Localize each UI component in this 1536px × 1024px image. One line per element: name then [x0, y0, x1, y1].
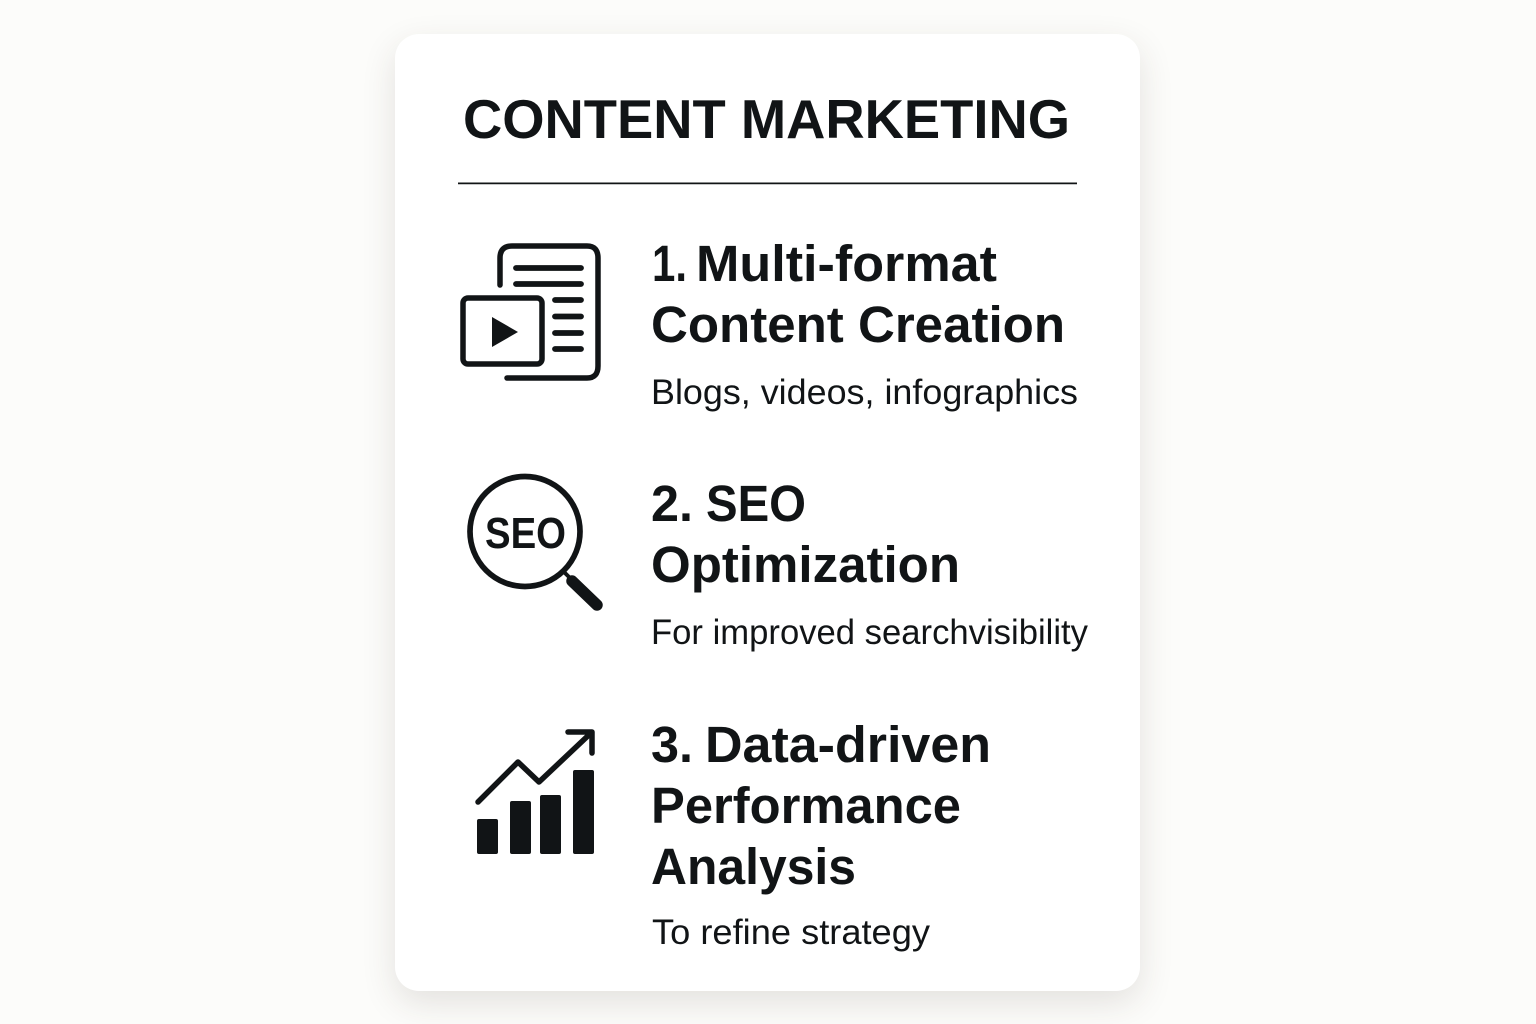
panel: card: [395, 34, 1140, 991]
heading: item 1: 1.: [652, 235, 687, 292]
heading: item 1: [651, 235, 1065, 353]
text: item 2 description: For improved searchvisibility: [651, 612, 1088, 652]
heading: item 1: Content Creation: [651, 296, 1065, 353]
icon: SEO magnifier: [470, 476, 597, 605]
heading: item 3: Analysis: [651, 838, 856, 895]
text: item 1 description: Blogs, videos, infographics: [651, 372, 1078, 412]
title: CONTENT MARKETING: [463, 88, 1070, 150]
icon: SEO magnifier: SEO: [485, 509, 566, 558]
icon: growth chart: [477, 732, 594, 854]
text: item 3 description: To refine strategy: [652, 912, 930, 952]
heading: item 2: [651, 475, 960, 593]
heading: item 2: 2.: [651, 475, 693, 532]
heading: item 3: Data-driven: [705, 716, 991, 773]
heading: item 3: 3.: [651, 716, 693, 773]
heading: item 3: Performance: [651, 777, 961, 834]
icon: document with video: [463, 246, 598, 378]
heading: item 2: Optimization: [651, 536, 960, 593]
heading: item 1: Multi-format: [696, 235, 997, 292]
heading: item 3: [651, 716, 991, 895]
heading: item 2: SEO: [706, 475, 806, 532]
